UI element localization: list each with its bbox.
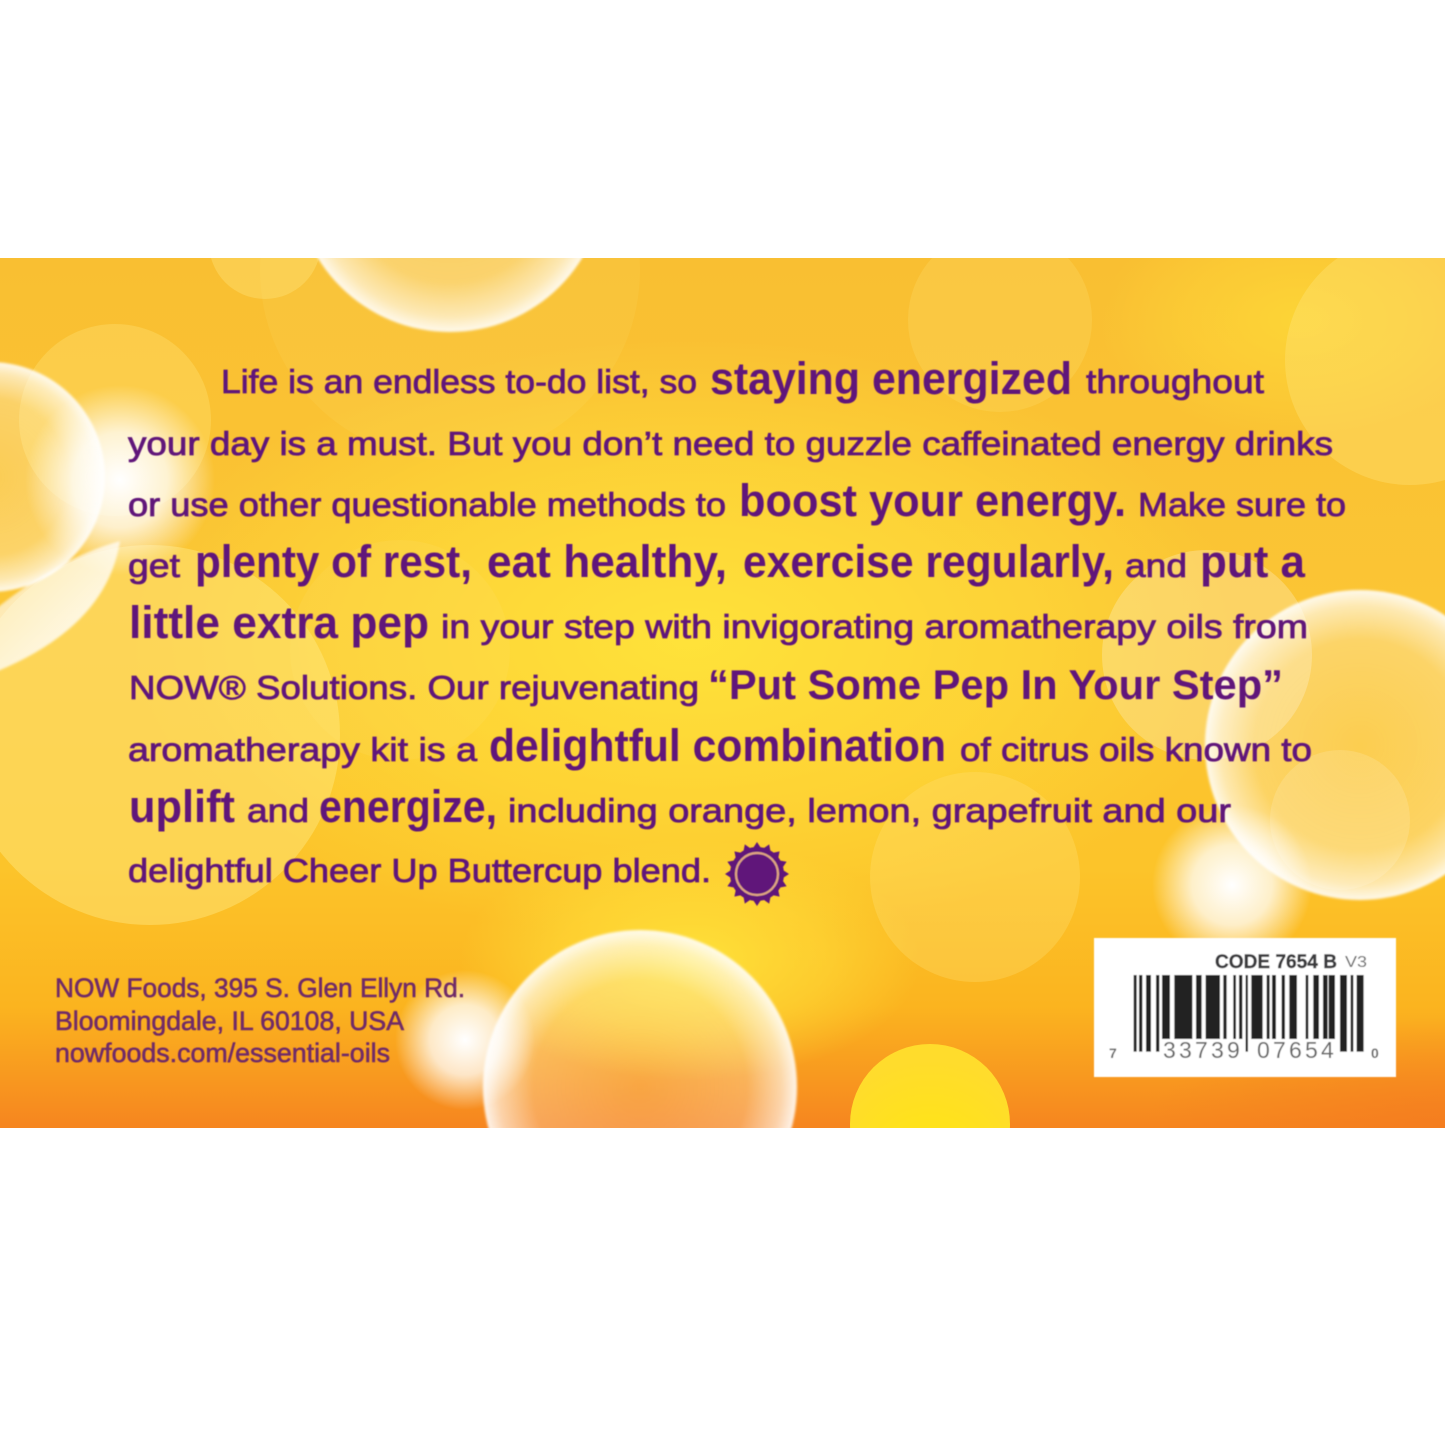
text line 7: aromatherapy kit is a <box>128 731 478 768</box>
text line 4: eat healthy, <box>487 536 727 587</box>
text line 4: plenty of rest, <box>195 536 472 587</box>
barcode digits: 0 <box>1371 1045 1379 1061</box>
text line 6: “Put Some Pep In Your Step” <box>708 661 1283 708</box>
panel: yellow orange bubble background <box>0 258 1445 1128</box>
text line 8: including orange, lemon, grapefruit and our <box>508 792 1231 829</box>
text line 2: your day is a must. But you don’t need to guzzle caffeinated energy drinks <box>128 425 1333 462</box>
text line 3: or use other questionable methods to <box>128 486 726 523</box>
barcode bars <box>1134 975 1364 1052</box>
text line 7 <box>128 720 1312 771</box>
text line 4 <box>128 536 1306 587</box>
text line 6 <box>129 661 1283 708</box>
icon: purple sun <box>725 842 789 906</box>
text line 4: get <box>128 547 180 584</box>
text line 3: boost your energy. <box>739 475 1126 526</box>
text line 5: little extra pep <box>129 597 429 648</box>
text line 7: of citrus oils known to <box>960 731 1312 768</box>
address line 1: NOW Foods, 395 S. Glen Ellyn Rd. <box>55 973 465 1003</box>
text line 5: in your step with invigorating aromatherapy oils from <box>441 608 1308 645</box>
text line 4: exercise regularly, <box>743 536 1114 587</box>
text line 4: and <box>1125 547 1187 584</box>
text line 4: put a <box>1200 536 1306 587</box>
text line 3 <box>128 475 1346 526</box>
text line 1: throughout <box>1086 363 1264 400</box>
body text block <box>128 353 1346 889</box>
text line 1 <box>221 353 1264 404</box>
text line 8: uplift <box>129 781 235 832</box>
barcode digits: 33739 <box>1163 1037 1243 1063</box>
text line 9: delightful Cheer Up Buttercup blend. <box>128 852 711 889</box>
barcode digits <box>1109 1037 1379 1063</box>
text line 8: energize, <box>319 781 497 832</box>
product code: CODE 7654 B <box>1215 952 1337 973</box>
text line 8 <box>129 781 1231 832</box>
barcode label <box>1094 938 1396 1077</box>
version mark: V3 <box>1345 954 1367 971</box>
barcode digits: 07654 <box>1257 1037 1337 1063</box>
text line 7: delightful combination <box>489 720 946 771</box>
text line 8: and <box>247 792 309 829</box>
barcode digits: 7 <box>1109 1045 1117 1061</box>
address line 2: Bloomingdale, IL 60108, USA <box>55 1006 404 1036</box>
text line 3: Make sure to <box>1138 486 1346 523</box>
address line 3: nowfoods.com/essential-oils <box>55 1038 390 1068</box>
text line 1: Life is an endless to-do list, so <box>221 363 697 400</box>
text line 1: staying energized <box>710 353 1072 404</box>
text line 5 <box>129 597 1308 648</box>
text line 6: NOW® Solutions. Our rejuvenating <box>129 669 699 706</box>
address block <box>55 973 465 1068</box>
